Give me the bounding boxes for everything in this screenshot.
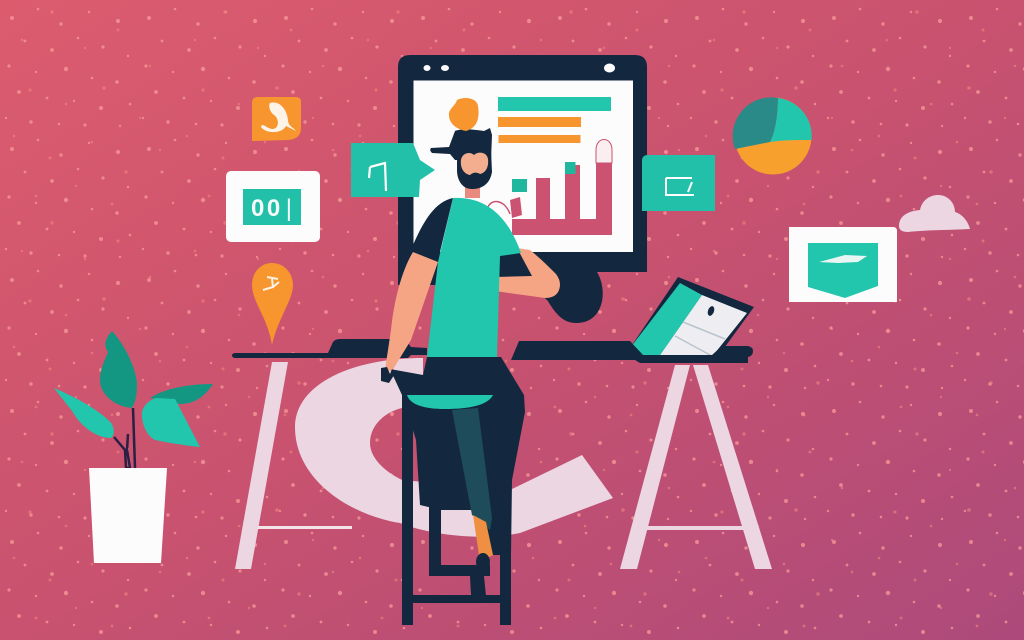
front leg xyxy=(452,408,492,530)
top leaf xyxy=(100,331,137,408)
right upper leaf xyxy=(150,384,213,404)
monitor xyxy=(398,55,647,323)
hair bun xyxy=(449,98,479,131)
chart: pie xyxy=(733,97,812,174)
plant stems xyxy=(114,408,135,468)
shirt xyxy=(427,198,521,357)
screen bar chart xyxy=(488,140,612,235)
neck xyxy=(465,186,480,198)
foot and shoe xyxy=(473,515,493,571)
face xyxy=(461,153,488,175)
icon: orange map pin xyxy=(252,263,293,345)
stool seat xyxy=(407,395,493,409)
back arm xyxy=(495,248,560,298)
icon: cloud xyxy=(899,195,970,232)
laptop xyxy=(630,277,754,362)
callout: right teal card xyxy=(642,155,715,211)
stool xyxy=(402,395,511,625)
counter panel xyxy=(243,189,301,225)
counter text: 00| xyxy=(251,195,294,222)
left shoulder xyxy=(413,198,453,260)
card: white counter card xyxy=(226,171,320,242)
left arm xyxy=(385,252,438,371)
trousers xyxy=(390,357,525,555)
beard xyxy=(457,150,492,189)
pot xyxy=(89,468,167,563)
left desk leg xyxy=(235,362,352,569)
large pale letter-like shape behind desk xyxy=(295,358,613,537)
icon: orange rounded square xyxy=(252,97,301,141)
screen header bars xyxy=(498,97,611,143)
right lower leaf xyxy=(142,398,200,447)
person xyxy=(381,98,560,571)
hand on desk xyxy=(381,367,396,383)
monitor screen xyxy=(414,80,633,252)
card: white image card xyxy=(789,227,897,302)
callout: left teal speech bubble xyxy=(351,143,435,197)
window dots xyxy=(424,64,615,72)
right desk legs xyxy=(620,365,772,569)
plant xyxy=(54,331,213,563)
left leaf xyxy=(54,388,114,438)
desk top xyxy=(232,339,753,363)
cap xyxy=(430,128,492,160)
